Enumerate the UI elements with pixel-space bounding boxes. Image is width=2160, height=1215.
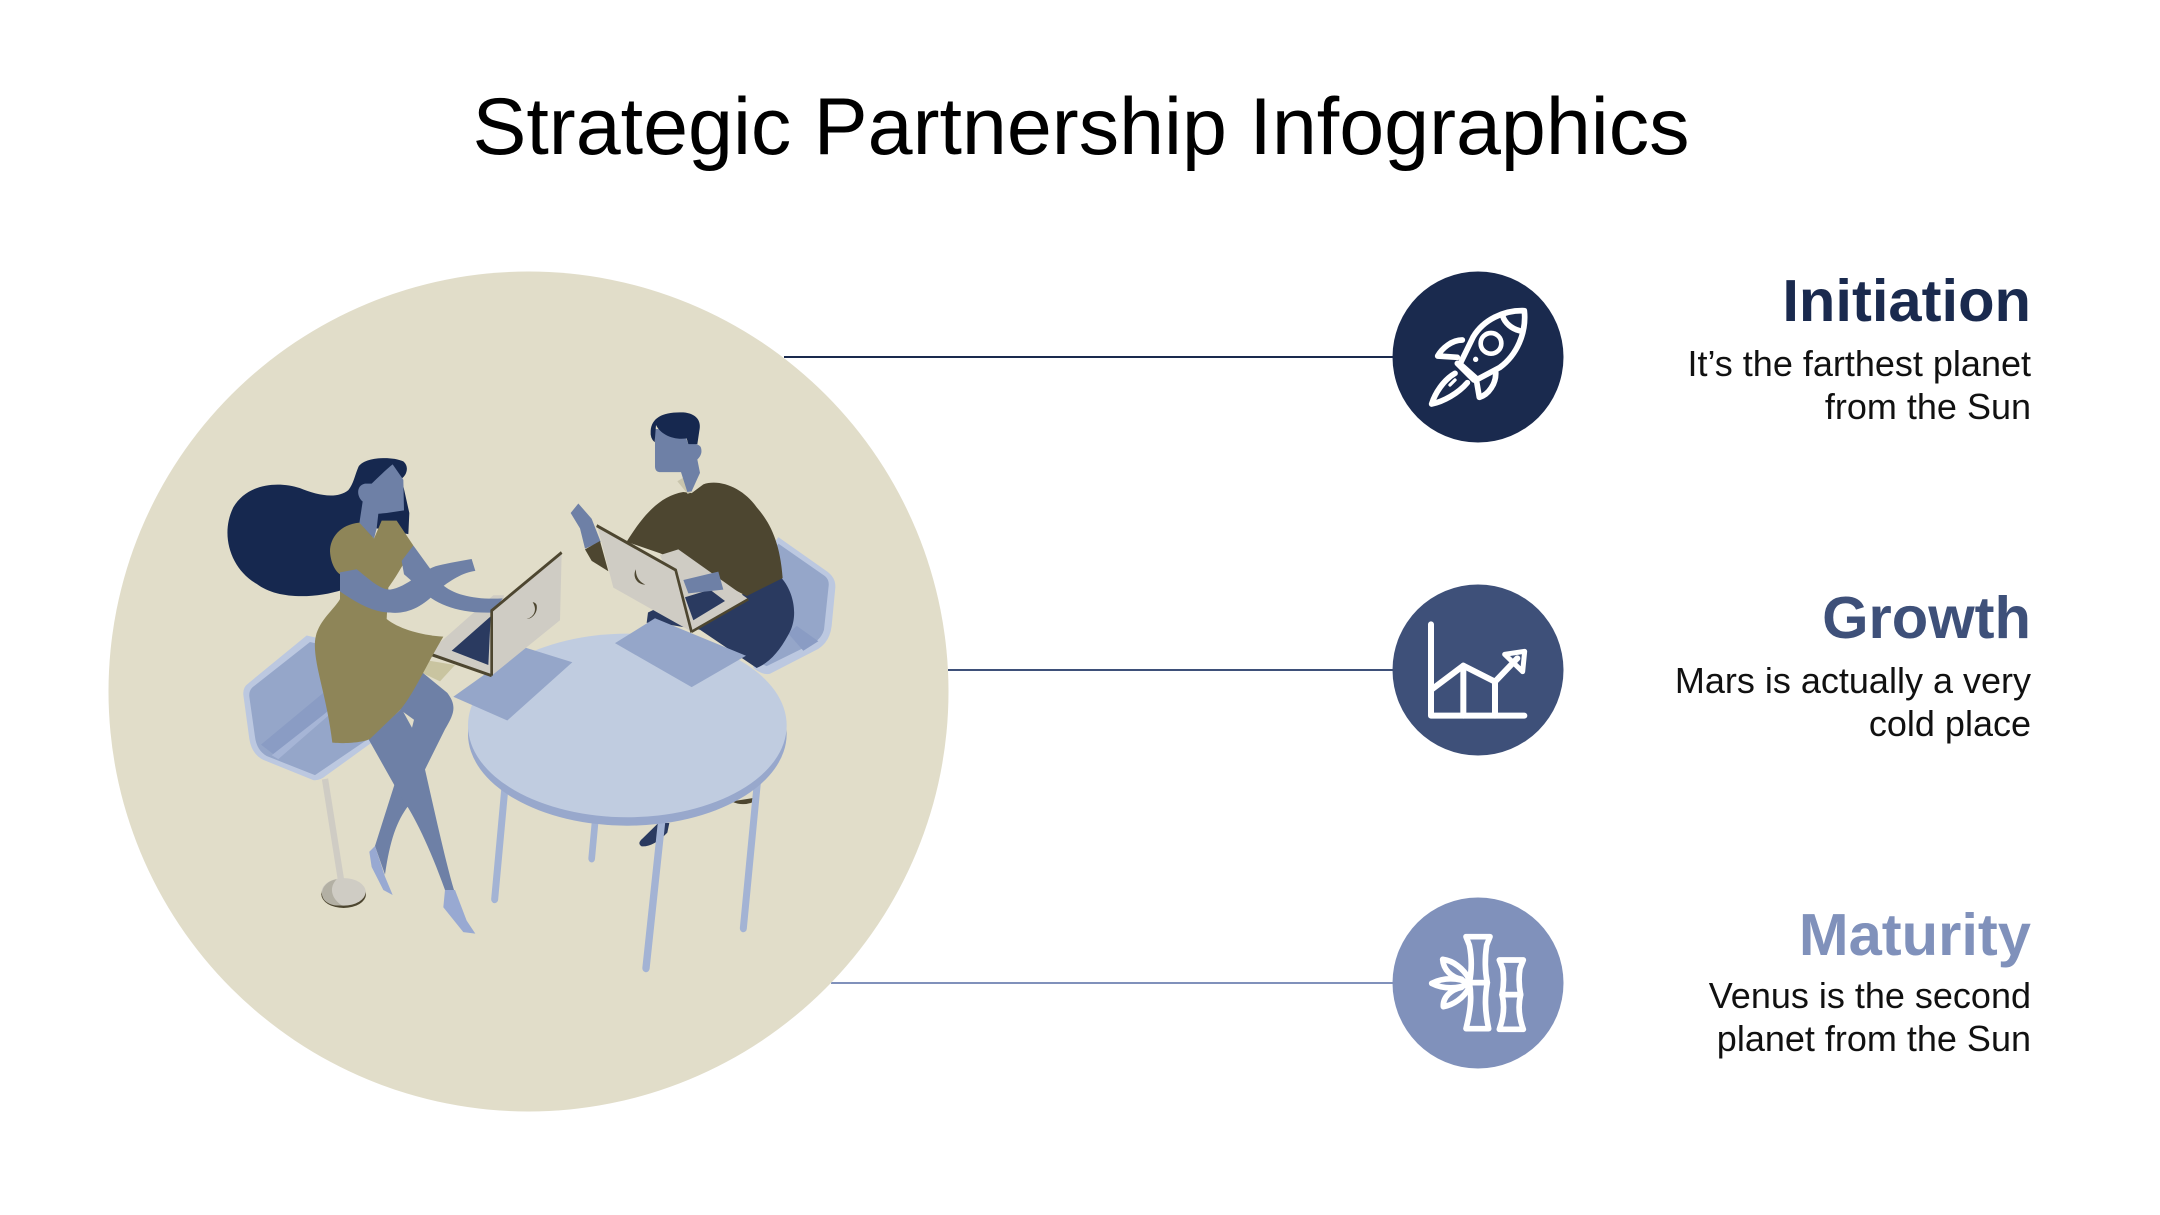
body: initiation: It’s the farthest planet (1687, 343, 2031, 384)
icon: growth chart (1392, 584, 1564, 756)
icon: bamboo (1392, 898, 1564, 1068)
man's raised hand (571, 503, 601, 549)
laptop base (422, 595, 504, 681)
woman's shoes (369, 846, 475, 934)
body: growth (1675, 660, 2031, 744)
body: maturity: planet from the Sun (1717, 1018, 2031, 1059)
man's chair (753, 537, 835, 674)
gap between dress and leg (403, 712, 414, 728)
woman's arm raised (340, 559, 475, 613)
woman's back leg (375, 783, 408, 875)
icon: rocket (1392, 272, 1564, 442)
woman's hair (227, 458, 409, 596)
title: Strategic Partnership Infographics (472, 82, 1690, 172)
body: initiation: from the Sun (1825, 386, 2031, 427)
woman's place mat (453, 647, 572, 720)
woman's arm to laptop (402, 546, 503, 613)
man's sweater (627, 483, 783, 596)
woman's laptop screen (492, 552, 562, 676)
man's sleeve (585, 541, 608, 571)
body: growth: cold place (1869, 703, 2031, 744)
woman's front leg (368, 672, 454, 890)
man's place mat (615, 618, 746, 687)
man's collar (677, 477, 693, 494)
man's hair (651, 412, 700, 444)
heading: maturity: Maturity (1799, 901, 2031, 968)
body: growth: Mars is actually a very (1675, 660, 2031, 701)
connector: initiation (784, 356, 1400, 358)
body: initiation (1687, 343, 2031, 427)
woman's chair (243, 635, 372, 780)
man's head (655, 429, 701, 492)
connector: growth (948, 669, 1400, 671)
woman's face and neck (358, 464, 404, 539)
woman's dress (315, 521, 443, 743)
chair post (325, 779, 342, 884)
body: maturity: Venus is the second (1709, 975, 2031, 1016)
man's trousers (647, 578, 794, 668)
body: maturity (1708, 975, 2031, 1059)
chair base (321, 878, 366, 908)
connector: maturity (831, 982, 1400, 984)
table legs (495, 783, 757, 968)
text block: initiation (1687, 267, 2031, 427)
man's shoes (639, 798, 753, 846)
text block: growth (1675, 584, 2031, 744)
woman group (227, 458, 562, 934)
text block: maturity (1708, 901, 2031, 1059)
table (468, 634, 787, 826)
heading: growth: Growth (1822, 584, 2031, 651)
background circle (108, 272, 948, 1112)
man and table group (453, 412, 835, 968)
man's laptop (597, 526, 748, 632)
heading: initiation: Initiation (1782, 267, 2031, 334)
